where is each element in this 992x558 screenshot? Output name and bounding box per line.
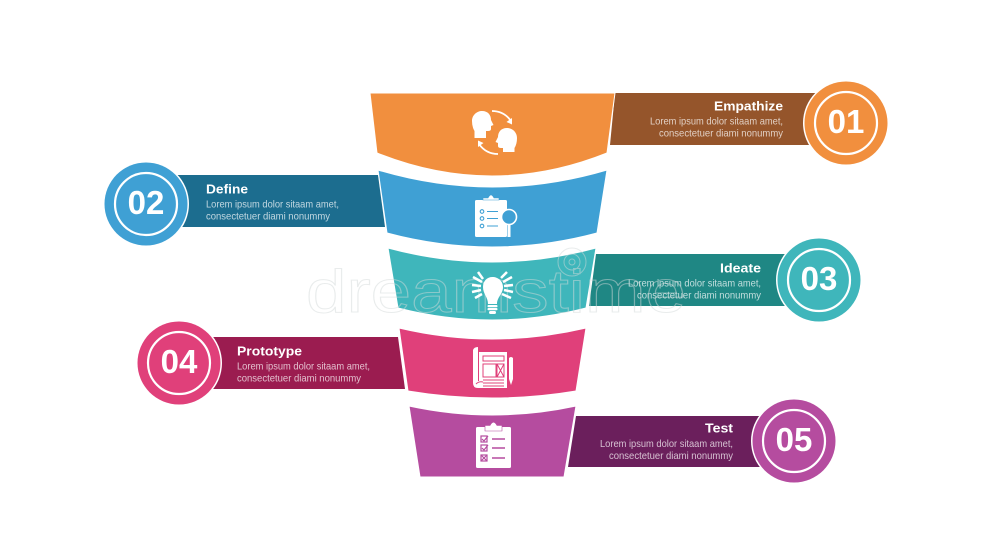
heading: Ideate: Ideate	[720, 260, 761, 276]
funnel segment: teal	[388, 248, 596, 320]
badge: 03	[776, 237, 862, 323]
text: Empathize description: consectetuer diami nonummy	[659, 128, 784, 140]
badge: 01	[803, 80, 889, 166]
text: Test description	[600, 438, 734, 462]
panel: step 01 Empathize banner	[610, 80, 889, 166]
icon: clipboard with magnifier	[475, 195, 516, 237]
icon: blueprint roll and pencil	[473, 347, 513, 388]
funnel segment: purple	[409, 406, 576, 477]
text: Test description: Lorem ipsum dolor sitaam amet,	[600, 438, 733, 450]
panel: step 04 Prototype banner	[136, 320, 405, 406]
panel: step 02 Define banner	[103, 161, 385, 247]
badge: 04	[136, 320, 222, 406]
badge: 02: 02	[128, 184, 164, 221]
text: Empathize description: Lorem ipsum dolor sitaam amet,	[650, 116, 783, 128]
text: Empathize description	[650, 116, 784, 140]
panel: funnel segments	[370, 93, 615, 477]
text: Define description: consectetuer diami nonummy	[206, 210, 331, 222]
heading: Empathize: Empathize	[714, 98, 783, 114]
badge: 04: 04	[161, 343, 198, 380]
badge: 05	[751, 398, 837, 484]
text: Ideate description: consectetuer diami nonummy	[637, 290, 762, 302]
badge: 01: 01	[828, 103, 864, 140]
heading: Prototype: Prototype	[237, 344, 302, 358]
watermark: dreamstime	[306, 258, 686, 325]
text: Ideate description	[628, 278, 762, 302]
icon: light bulb with rays	[472, 272, 513, 314]
text: Test description: consectetuer diami nonummy	[609, 450, 734, 462]
funnel segment: blue	[378, 170, 607, 247]
text: Prototype description	[237, 360, 370, 384]
funnel segment: orange	[370, 93, 615, 176]
heading: Test: Test	[705, 420, 734, 436]
funnel segment: pink	[399, 328, 586, 398]
badge: 05: 05	[776, 421, 812, 458]
heading: Define: Define	[206, 182, 248, 196]
icon: checklist clipboard	[476, 422, 511, 468]
panel: step 03 Ideate banner	[589, 237, 862, 323]
text: Prototype description: Lorem ipsum dolor sitaam amet,	[237, 360, 370, 372]
text: Ideate description: Lorem ipsum dolor sitaam amet,	[628, 278, 761, 290]
text: Prototype description: consectetuer diami nonummy	[237, 372, 362, 384]
panel: step 05 Test banner	[568, 398, 837, 484]
icon: two heads with swap arrows	[472, 111, 517, 154]
text: Define description	[206, 198, 339, 222]
badge: 03: 03	[801, 260, 837, 297]
text: Define description: Lorem ipsum dolor sitaam amet,	[206, 198, 339, 210]
badge: 02	[103, 161, 189, 247]
